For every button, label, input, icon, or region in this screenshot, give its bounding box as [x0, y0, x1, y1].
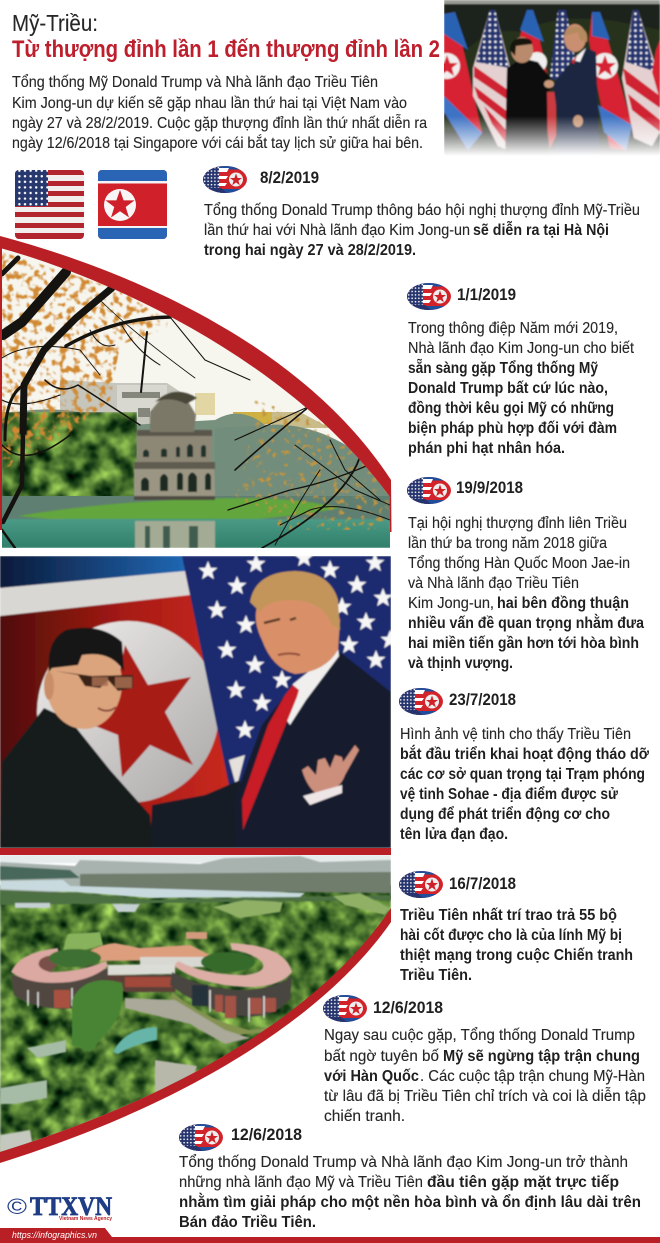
- right wing: [170, 972, 292, 1017]
- description: nhiều vấn đề quan trọng nhằm đưa: [408, 614, 644, 632]
- copyright symbol: ©: [7, 1194, 27, 1219]
- description: những nhà lãnh đạo Mỹ và Triều Tiên: [179, 1174, 423, 1191]
- description: và Nhà lãnh đạo Triều Tiên: [408, 575, 579, 592]
- description: hài cốt được cho là của lính Mỹ bị: [400, 927, 622, 944]
- agency name: TTXVN: [30, 1192, 112, 1221]
- description: Nhà lãnh đạo Kim Jong-un cho biết: [408, 340, 635, 357]
- description: Bán đảo Triều Tiên.: [179, 1214, 316, 1231]
- icon: flags emblem: [203, 166, 247, 193]
- description: . Các cuộc tập trận chung Mỹ-Hàn: [420, 1068, 645, 1085]
- flag: United States: [15, 170, 84, 239]
- description: lần thứ ba trong năm 2018 giữa: [408, 535, 607, 552]
- logo: TTXVN: [7, 1192, 113, 1222]
- photo: Hoan Kiem lake and Turtle Tower: [0, 250, 391, 548]
- photo: handshake with flags: [434, 0, 660, 156]
- icon: flags emblem: [323, 995, 367, 1022]
- foliage background: [0, 885, 391, 1155]
- hazy distant buildings: [60, 380, 182, 424]
- yellow foliage lower right: [235, 400, 390, 530]
- description: Triều Tiên nhất trí trao trả 55 bộ: [400, 907, 617, 924]
- description: chiến tranh.: [324, 1108, 405, 1125]
- title line 2: Từ thượng đỉnh lần 1 đến thượng đỉnh lần 2: [12, 36, 440, 63]
- title line 1: Mỹ-Triều:: [12, 10, 98, 36]
- tree branches: [2, 258, 390, 548]
- title: [12, 10, 440, 63]
- description: [324, 1027, 646, 1125]
- description: sẽ diễn ra tại Hà Nội: [473, 222, 609, 239]
- intro text block: [12, 73, 427, 152]
- description: nhằm tìm giải pháp cho một nền hòa bình và ổn định lâu dài trên: [179, 1193, 641, 1211]
- description: lần thứ hai với Nhà lãnh đạo Kim Jong-un: [204, 222, 470, 239]
- far tree line: [2, 409, 390, 497]
- description: và thịnh vượng.: [408, 655, 513, 672]
- event: 8/2/2019: [203, 166, 640, 259]
- description: vệ tinh Sohae - địa điểm được sử: [400, 786, 619, 803]
- date: 1/1/2019: [457, 286, 516, 304]
- description: Tại hội nghị thượng đỉnh liên Triều: [408, 515, 627, 532]
- icon: flags emblem: [407, 477, 451, 504]
- orange foliage upper left: [2, 252, 175, 470]
- photo: Capella hotel Singapore: [0, 855, 391, 1155]
- description: [400, 726, 650, 843]
- description: Triều Tiên.: [400, 967, 472, 984]
- grey-green trees right: [349, 448, 389, 496]
- website url: https://infographics.vn: [12, 1230, 97, 1241]
- red arc frame: Hanoi photo: [0, 236, 392, 532]
- red arc frame: hotel photo: [0, 908, 391, 1163]
- description: dụng để phát triển động cơ cho: [400, 806, 610, 823]
- description: đầu tiên gặp mặt trực tiếp: [427, 1174, 619, 1191]
- description: Trong thông điệp Năm mới 2019,: [408, 320, 618, 337]
- event: 19/9/2018: [407, 477, 644, 672]
- description: Mỹ sẽ ngừng tập trận chung: [443, 1048, 640, 1065]
- footer band: [0, 1228, 660, 1243]
- date: 23/7/2018: [449, 691, 516, 709]
- description: [204, 202, 640, 259]
- description: Tổng thống Hàn Quốc Moon Jae-in: [408, 555, 630, 572]
- intro text block: ngày 12/6/2018 tại Singapore với cái bắt tay lịch sử giữa hai bên.: [12, 133, 423, 152]
- intro text block: Tổng thống Mỹ Donald Trump và Nhà lãnh đạo Triều Tiên: [12, 73, 378, 91]
- description: [408, 515, 644, 672]
- green trees left: [2, 412, 137, 504]
- red divider bar: [0, 848, 391, 855]
- description: Kim Jong-un,: [408, 595, 494, 612]
- description: [408, 320, 635, 457]
- description: biện pháp phù hợp đối với đàm: [408, 420, 617, 437]
- description: tên lửa đạn đạo.: [400, 826, 508, 843]
- description: sẵn sàng gặp Tổng thống Mỹ: [408, 360, 598, 377]
- description: đồng thời kêu gọi Mỹ có những: [408, 400, 614, 417]
- description: thiệt mạng trong cuộc Chiến tranh: [400, 947, 633, 964]
- description: với Hàn Quốc: [324, 1068, 419, 1085]
- event: 16/7/2018: [399, 871, 633, 984]
- date: 8/2/2019: [260, 169, 319, 187]
- description: Hình ảnh vệ tinh cho thấy Triều Tiên: [400, 726, 631, 743]
- sky and skyline: [0, 855, 391, 863]
- icon: flags emblem: [407, 283, 451, 310]
- grounds: [170, 992, 268, 1036]
- icon: flags emblem: [399, 871, 443, 898]
- event: 1/1/2019: [407, 283, 635, 457]
- description: bất ngờ tuyên bố: [324, 1048, 439, 1065]
- event: 12/6/2018 second: [179, 1124, 641, 1231]
- description: hai miền tiến gần hơn tới hòa bình: [408, 635, 639, 652]
- description: Ngay sau cuộc gặp, Tổng thống Donald Trump: [324, 1027, 635, 1044]
- description: phán phi hạt nhân hóa.: [408, 440, 565, 457]
- icon: flags emblem: [399, 688, 443, 715]
- left wing: [11, 968, 108, 1009]
- description: Tổng thống Donald Trump và Nhà lãnh đạo Kim Jong-un trở thành: [179, 1154, 628, 1171]
- description: Donald Trump bất cứ lúc nào,: [408, 380, 608, 397]
- date: 16/7/2018: [449, 875, 516, 893]
- description: trong hai ngày 27 và 28/2/2019.: [204, 242, 416, 259]
- description: hai bên đồng thuận: [497, 595, 629, 612]
- centre building: [82, 943, 210, 961]
- flag: North Korea: [98, 170, 167, 239]
- event: 23/7/2018: [399, 688, 650, 843]
- event: 12/6/2018 first: [323, 995, 646, 1125]
- intro text block: ngày 27 và 28/2/2019. Cuộc gặp thượng đỉnh lần thứ nhất diễn ra: [12, 113, 427, 132]
- description: [179, 1154, 641, 1231]
- icon: flags emblem: [179, 1124, 223, 1151]
- description: [400, 907, 633, 984]
- agency subtitle: Vietnam News Agency: [59, 1216, 113, 1222]
- description: từ lâu đã bị Triều Tiên chỉ trích và coi là diễn tập: [324, 1088, 646, 1105]
- description: Tổng thống Donald Trump thông báo hội nghị thượng đỉnh Mỹ-Triều: [204, 202, 640, 219]
- photo: Kim Jong-un and Donald Trump: [0, 548, 400, 848]
- intro text block: Kim Jong-un dự kiến sẽ gặp nhau lần thứ hai tại Việt Nam vào: [12, 95, 407, 112]
- date: 12/6/2018: [373, 999, 443, 1017]
- date: 19/9/2018: [456, 479, 523, 497]
- date: 12/6/2018: [231, 1126, 302, 1144]
